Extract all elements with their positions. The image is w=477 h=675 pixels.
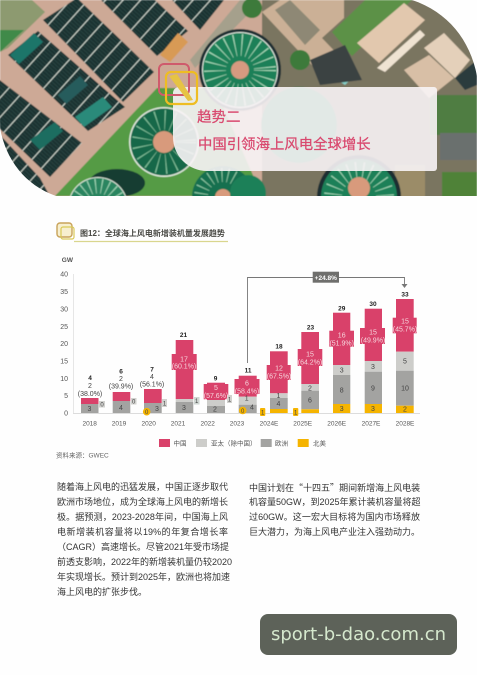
- x axis labels: [82, 420, 415, 428]
- bar 2021: 21: [180, 332, 187, 339]
- bar 2027E: (49.9%): [361, 338, 385, 344]
- bar 2023: [234, 368, 260, 415]
- x axis labels: 2028E: [396, 420, 415, 428]
- bar 2020: 3: [155, 406, 159, 413]
- bar 2021: 17: [180, 356, 188, 364]
- chart title: 图12：全球海上风电新增装机量发展趋势: [80, 228, 225, 238]
- growth bracket arrow: +24.8%: [315, 275, 337, 282]
- bar 2026E: 3: [340, 406, 344, 413]
- bar 2020: 1: [163, 402, 167, 408]
- x axis labels: 2021: [171, 420, 186, 428]
- bar 2025E: [293, 324, 322, 416]
- bar 2027E: 3: [371, 406, 375, 413]
- bar 2028E: 15: [401, 318, 409, 326]
- bar 2028E: 10: [401, 386, 409, 392]
- x axis labels: 2026E: [327, 420, 347, 428]
- bar 2024E: 1: [277, 393, 281, 400]
- icon: title squares: [158, 63, 198, 106]
- bar 2027E: 30: [369, 301, 377, 308]
- bar 2027E: 3: [371, 364, 375, 371]
- y axis: GW: [62, 257, 74, 264]
- text block: left column: 年实现增长。预计到2025年，欧洲也将加速: [57, 572, 230, 582]
- bar 2025E: 15: [306, 352, 314, 358]
- bar 2020: 7: [150, 366, 154, 374]
- bar 2024E: [260, 344, 291, 416]
- bar 2021: 1: [195, 399, 199, 405]
- x axis labels: 2023: [230, 420, 245, 428]
- bar 2025E: 23: [307, 324, 314, 332]
- bar 2022: 2: [213, 406, 217, 414]
- bar 2027E: 9: [371, 386, 375, 392]
- bar 2020: 4: [150, 374, 154, 381]
- heading: trend two: 趋势二: [197, 110, 240, 126]
- chart panel: [56, 222, 420, 460]
- bar 2022: 5: [214, 385, 218, 392]
- bar 2023: 1: [245, 396, 249, 402]
- text block: left column: 极。据预测，2023-2028年间，中国海上风: [57, 512, 228, 522]
- text block: right column: [249, 481, 421, 537]
- bar 2018: 0: [100, 402, 104, 408]
- watermark badge: [260, 614, 457, 655]
- y axis: 30: [60, 306, 68, 314]
- x axis labels: 2024E: [260, 420, 279, 428]
- x axis labels: 2019: [112, 420, 127, 428]
- bar 2027E: [360, 301, 385, 413]
- legend: [159, 438, 326, 448]
- y axis: 25: [60, 324, 68, 331]
- bar 2019: (39.9%): [109, 384, 133, 390]
- legend: 亚太（除中国）: [211, 438, 256, 448]
- bar 2022: 9: [214, 376, 218, 382]
- x axis labels: 2020: [141, 420, 156, 428]
- bar 2022: 1: [228, 398, 232, 404]
- heading: China leads: 中国引领海上风电全球增长: [198, 137, 371, 153]
- bar 2026E: [329, 306, 354, 413]
- lawn: [55, 88, 262, 196]
- bar 2027E: 15: [369, 330, 377, 336]
- bar 2023: 0: [241, 409, 245, 415]
- chart title icon: [57, 223, 74, 239]
- text block: left column: 海上风电的扩张步伐。: [57, 587, 147, 597]
- bar 2020: [140, 366, 167, 416]
- bar 2025E: (64.2%): [298, 360, 322, 366]
- text block: left column: 电新增装机容量将以19%的年复合增长率: [57, 527, 228, 537]
- y axis: 35: [60, 289, 68, 296]
- bar 2023: 6: [245, 380, 249, 388]
- text block: left column: 随着海上风电的迅猛发展，中国正逐步取代: [57, 482, 228, 492]
- bar 2028E: [393, 292, 417, 414]
- bar 2028E: 33: [401, 292, 409, 298]
- bar 2019: 4: [119, 405, 123, 412]
- bar 2023: (58.4%): [235, 388, 259, 396]
- title panel: [173, 87, 437, 171]
- bar 2022: [204, 376, 232, 414]
- bar 2025E: 6: [308, 398, 312, 404]
- bar 2024E: (67.5%): [267, 374, 291, 380]
- y axis: [60, 257, 74, 418]
- bar 2028E: 2: [403, 406, 407, 414]
- y axis: 5: [64, 393, 68, 400]
- bar 2024E: 1: [261, 410, 265, 416]
- watermark badge: sport-b-dao.com.cn: [271, 624, 446, 645]
- x axis labels: 2018: [82, 420, 97, 428]
- bar 2024E: 12: [275, 366, 283, 372]
- text block: left column: （CAGR）高速增长。尽管2021年受市场提: [57, 542, 229, 552]
- bar 2026E: 8: [340, 388, 344, 394]
- bar 2026E: 29: [338, 306, 346, 312]
- text block: right column: 巨大潜力，为海上风电产业注入强劲动力。: [249, 527, 420, 537]
- bar 2028E: (45.7%): [393, 326, 417, 334]
- source note: 资料来源：GWEC: [56, 450, 109, 460]
- bar 2028E: 5: [403, 358, 407, 366]
- bar 2018: 4: [88, 375, 92, 382]
- y axis: 15: [60, 358, 68, 366]
- bar 2018: (38.0%): [78, 391, 102, 398]
- bar 2023: 11: [245, 368, 252, 374]
- bar 2026E: 3: [340, 368, 344, 374]
- text block: left column: 前透支影响，2022年的新增装机量仍较2020: [57, 557, 232, 567]
- bar 2026E: 16: [338, 332, 346, 340]
- text block: right column: 过60GW。这一宏大目标将为国内市场释放: [249, 512, 420, 522]
- growth bracket arrow: [248, 272, 408, 363]
- bar 2018: [78, 375, 105, 413]
- bar 2024E: 18: [275, 344, 283, 350]
- hero aerial photo: [0, 0, 477, 196]
- legend: 北美: [313, 438, 326, 448]
- x axis labels: 2027E: [362, 420, 381, 428]
- clarifiers: [199, 29, 281, 111]
- bar 2019: 0: [132, 400, 136, 406]
- y axis: 20: [60, 341, 68, 348]
- y axis: 10: [60, 376, 68, 383]
- bar 2022: (57.6%): [204, 393, 228, 400]
- bar 2026E: (51.9%): [329, 340, 354, 348]
- bar 2019: 6: [119, 368, 123, 376]
- bar 2021: [172, 332, 200, 413]
- tank blocks: [43, 0, 154, 102]
- x axis labels: 2025E: [293, 420, 313, 428]
- text block: right column: 机容量50GW，到2025年累计装机容量将超: [249, 497, 421, 507]
- bar 2021: 3: [182, 405, 186, 412]
- bar 2018: 3: [88, 406, 92, 413]
- legend: 欧洲: [275, 438, 288, 448]
- bar 2020: 0: [145, 410, 149, 416]
- bar 2025E: 1: [294, 410, 298, 416]
- bar 2024E: 4: [277, 401, 281, 408]
- bar 2021: (60.1%): [172, 364, 196, 370]
- x axis labels: 2022: [200, 420, 215, 428]
- y axis: 40: [60, 272, 68, 278]
- text block: left column: 欧洲市场地位，成为全球海上风电的新增长: [57, 497, 228, 507]
- bar 2019: [109, 368, 136, 413]
- bar 2023: 4: [250, 404, 254, 412]
- right ground: [262, 0, 477, 197]
- text block: left column: [57, 482, 232, 597]
- bar 2025E: 2: [308, 386, 312, 392]
- bar 2018: 2: [88, 383, 92, 390]
- bar 2019: 2: [119, 376, 123, 383]
- bar 2020: (56.1%): [140, 382, 164, 388]
- legend: 中国: [174, 438, 186, 448]
- text block: right column: 中国计划在“十四五”期间新增海上风电装: [249, 481, 420, 494]
- y axis: 0: [64, 410, 68, 418]
